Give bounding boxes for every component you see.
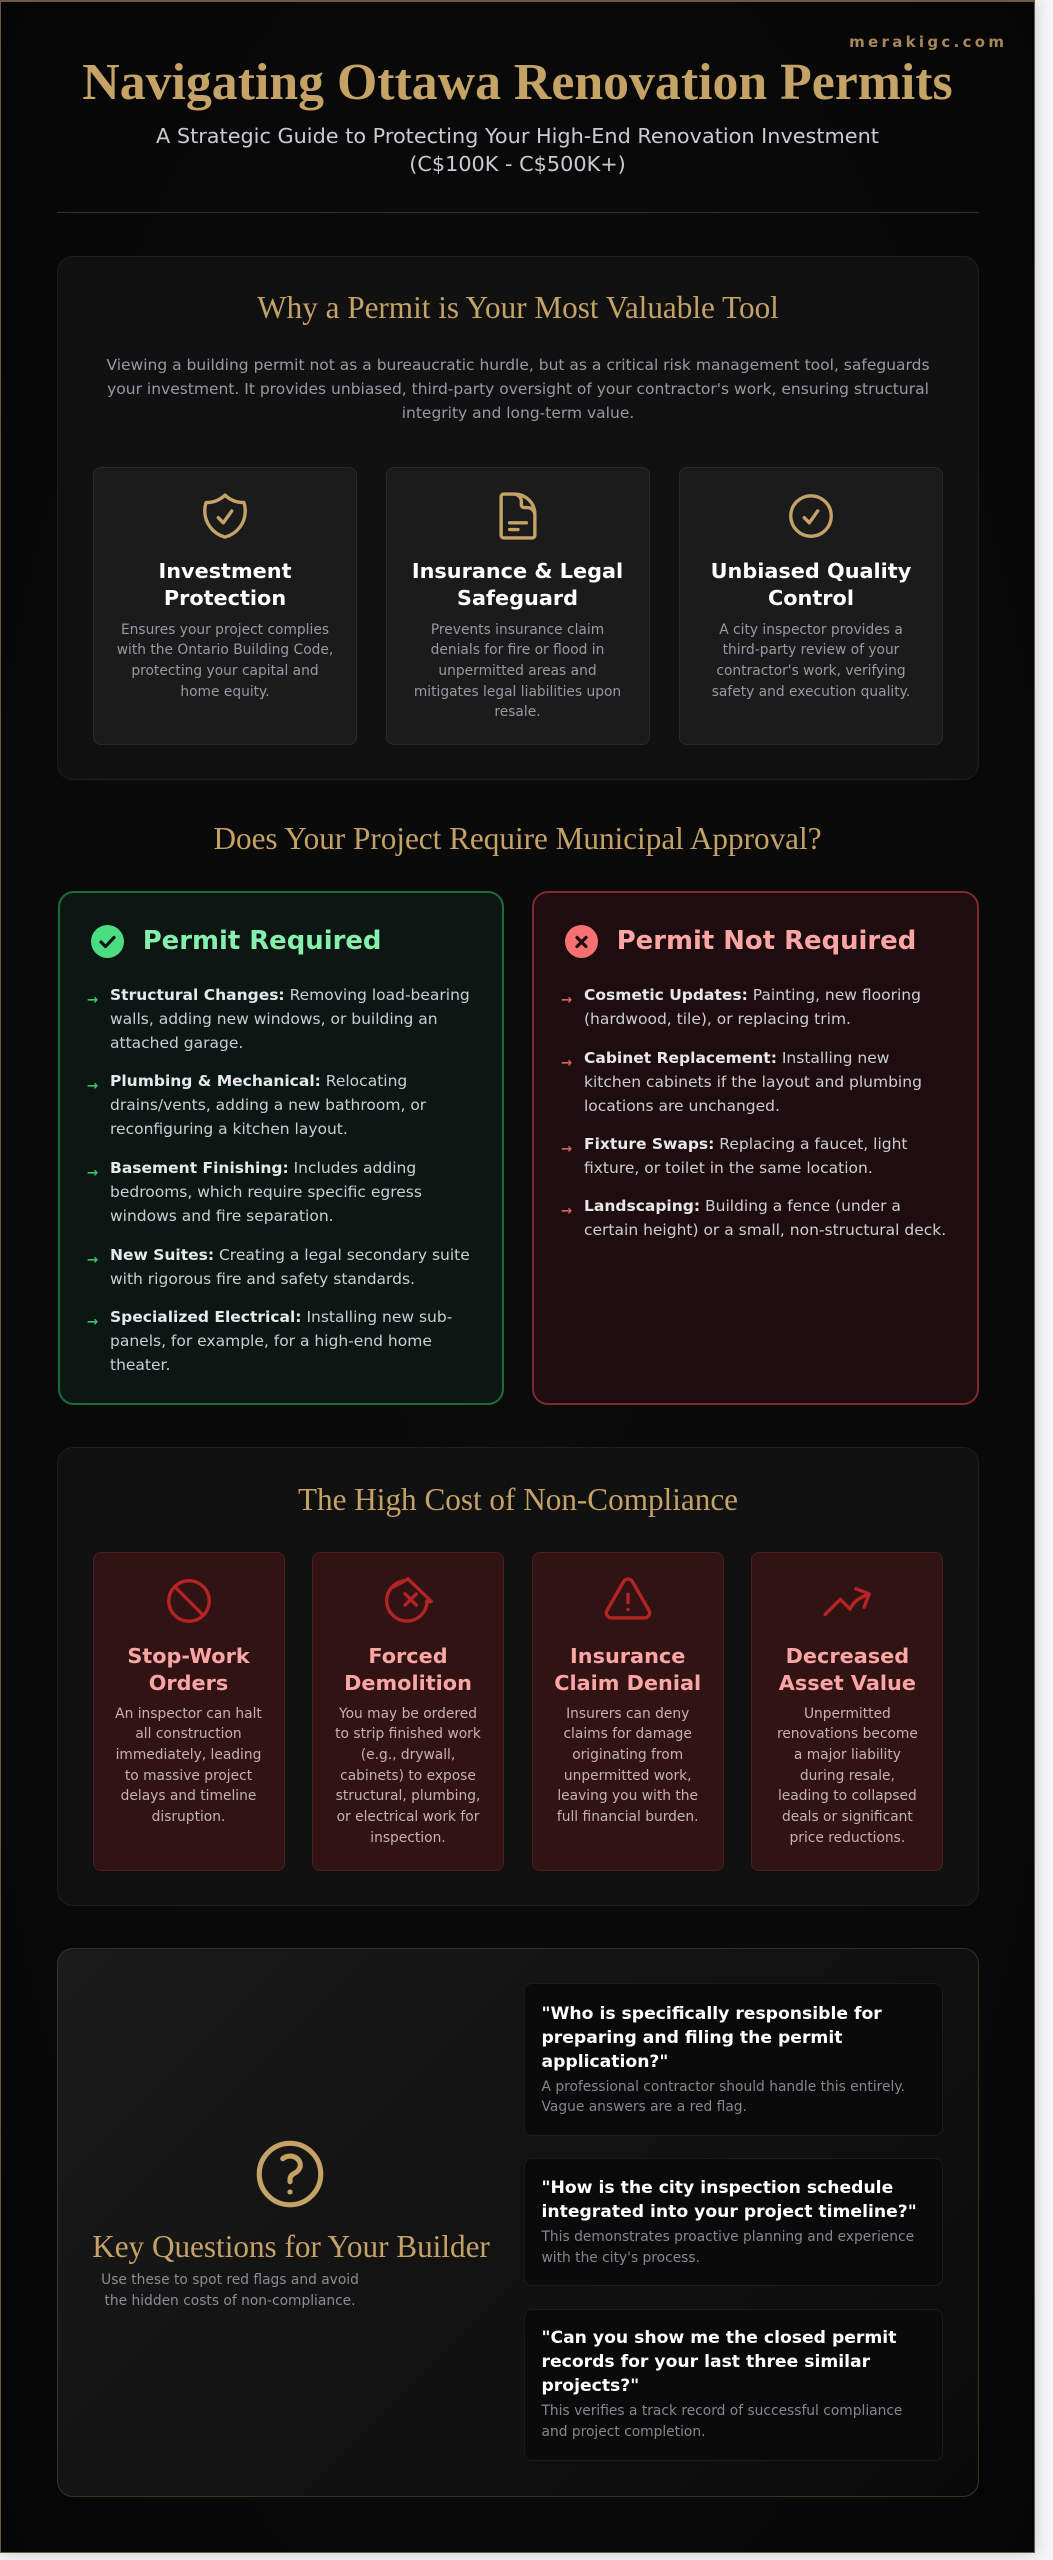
card text: third-party review of your xyxy=(723,642,899,658)
item: basement finishing: bedrooms, which require specific egress xyxy=(110,1183,422,1201)
card text: during resale, xyxy=(800,1768,895,1784)
question: integrated into your project timeline?" xyxy=(542,2202,917,2222)
answer xyxy=(541,2229,914,2266)
panel: permit required xyxy=(58,891,504,1405)
supporting text xyxy=(101,2272,359,2309)
card title xyxy=(711,558,911,610)
icon: red x xyxy=(565,925,598,958)
item: basement finishing: → xyxy=(87,1165,98,1181)
card: forced demolition xyxy=(312,1552,504,1871)
question card 1 xyxy=(524,1983,943,2136)
icon: question mark xyxy=(256,2140,324,2208)
card text: You may be ordered xyxy=(339,1706,477,1722)
card title: Stop-Work xyxy=(127,1644,250,1668)
card text: a major liability xyxy=(794,1747,901,1763)
intro paragraph: your investment. It provides unbiased, third-party oversight of your contractor's work, ensuring structural xyxy=(107,380,929,398)
item: new suites: New Suites: Creating a legal secondary suite xyxy=(110,1246,470,1264)
card text: (e.g., drywall, xyxy=(361,1747,455,1763)
item: new suites: with rigorous fire and safety standards. xyxy=(110,1270,415,1288)
item: landscaping: Landscaping: Building a fence (under a xyxy=(584,1197,901,1215)
card title: Protection xyxy=(164,586,286,610)
item: basement finishing xyxy=(87,1159,422,1225)
card text: Unpermitted xyxy=(804,1706,891,1722)
icon: green check xyxy=(91,925,124,958)
card title xyxy=(554,1644,701,1695)
item: plumbing and mechanical: drains/vents, adding a new bathroom, or xyxy=(110,1096,426,1114)
card text xyxy=(115,1706,262,1825)
item: plumbing and mechanical: → xyxy=(87,1078,98,1094)
card text: leaving you with the xyxy=(557,1788,698,1804)
card title: Asset Value xyxy=(779,1671,916,1695)
card text: denials for fire or flood in xyxy=(431,642,604,658)
icon: warning triangle xyxy=(604,1577,652,1620)
card text: structural, plumbing, xyxy=(336,1788,480,1804)
item: cabinet replacement: Cabinet Replacement: Installing new xyxy=(584,1049,889,1067)
answer: This demonstrates proactive planning and experience xyxy=(542,2229,914,2245)
card text: protecting your capital and xyxy=(131,663,319,679)
icon: damaged circle with x xyxy=(384,1577,434,1623)
panel: key questions for your builder xyxy=(57,1948,979,2497)
icon: shield check xyxy=(203,493,247,539)
intro paragraph xyxy=(106,356,930,422)
card text: resale. xyxy=(494,704,541,720)
item: fixture swaps: Fixture Swaps: Replacing a faucet, light xyxy=(584,1135,908,1153)
heading: why a permit: Why a Permit is Your Most Valuable Tool xyxy=(257,290,779,325)
card text xyxy=(335,1706,481,1846)
card title: Safeguard xyxy=(457,586,578,610)
item: plumbing and mechanical: reconfiguring a kitchen layout. xyxy=(110,1120,348,1138)
item: specialized electrical: Specialized Electrical: Installing new sub- xyxy=(110,1308,452,1326)
card text: claims for damage xyxy=(563,1726,692,1742)
card text: unpermitted work, xyxy=(564,1768,692,1784)
question: "Who is specifically responsible for xyxy=(542,2004,882,2024)
answer: and project completion. xyxy=(542,2424,705,2440)
question xyxy=(542,2178,917,2222)
card text: all construction xyxy=(135,1726,242,1742)
item: basement finishing: windows and fire separation. xyxy=(110,1207,334,1225)
card title: Insurance xyxy=(570,1644,685,1668)
item: cabinet replacement xyxy=(561,1049,922,1115)
card text: price reductions. xyxy=(790,1830,905,1846)
icon: check circle xyxy=(789,494,833,538)
item: fixture swaps: → xyxy=(561,1141,572,1157)
card text: safety and execution quality. xyxy=(712,684,910,700)
item: specialized electrical: → xyxy=(87,1314,98,1330)
title: Navigating Ottawa Renovation Permits xyxy=(82,54,953,111)
card title xyxy=(158,558,292,610)
card text xyxy=(777,1706,918,1846)
card text: disruption. xyxy=(152,1809,225,1825)
item: structural changes: attached garage. xyxy=(110,1034,243,1052)
subtitle xyxy=(156,124,879,176)
item: cabinet replacement: → xyxy=(561,1055,572,1071)
icon: trend arrow xyxy=(823,1587,871,1616)
card title: Demolition xyxy=(344,1671,472,1695)
item: specialized electrical: panels, for example, for a high-end home xyxy=(110,1332,432,1350)
intro paragraph: Viewing a building permit not as a bureaucratic hurdle, but as a critical risk management tool, safeguards xyxy=(106,356,930,374)
intro paragraph: integrity and long-term value. xyxy=(402,404,634,422)
card text: unpermitted areas and xyxy=(438,663,597,679)
item: plumbing and mechanical xyxy=(87,1072,426,1138)
card title: Investment xyxy=(158,558,292,582)
icon: document xyxy=(499,492,537,540)
card text: inspection. xyxy=(370,1830,446,1846)
card title: Unbiased Quality xyxy=(711,558,911,582)
question: preparing and filing the permit xyxy=(542,2028,842,2048)
panel: permit not required xyxy=(532,891,979,1405)
card text: or electrical work for xyxy=(337,1809,479,1825)
item: cabinet replacement: kitchen cabinets if the layout and plumbing xyxy=(584,1073,922,1091)
card title: Insurance & Legal xyxy=(412,558,623,582)
icon: no symbol xyxy=(167,1579,211,1623)
card text xyxy=(712,622,910,700)
card text: leading to collapsed xyxy=(778,1788,917,1804)
heading: does your project require municipal approval: Does Your Project Require Municipal Approval? xyxy=(213,821,822,856)
question card 2 xyxy=(524,2158,943,2286)
item: cosmetic updates: (hardwood, tile), or replacing trim. xyxy=(584,1010,851,1028)
answer xyxy=(542,2079,905,2115)
card text: with the Ontario Building Code, xyxy=(117,642,333,658)
question card 3 xyxy=(524,2308,943,2461)
card text: delays and timeline xyxy=(121,1788,256,1804)
heading: high cost: The High Cost of Non-Compliance xyxy=(298,1482,738,1517)
card text: Insurers can deny xyxy=(566,1706,689,1722)
card text: renovations become xyxy=(777,1726,918,1742)
card text: to massive project xyxy=(125,1768,252,1784)
card text: An inspector can halt xyxy=(115,1706,262,1722)
card title xyxy=(127,1644,250,1695)
item: landscaping: → xyxy=(561,1203,572,1219)
panel heading: Permit Required xyxy=(143,926,381,956)
item: cosmetic updates xyxy=(561,986,921,1028)
card text xyxy=(557,1706,699,1825)
answer: A professional contractor should handle this entirely. xyxy=(542,2079,905,2095)
question xyxy=(542,2326,896,2398)
answer: Vague answers are a red flag. xyxy=(542,2099,747,2115)
item: plumbing and mechanical: Plumbing & Mechanical: Relocating xyxy=(110,1072,407,1090)
card title xyxy=(344,1644,472,1695)
item: specialized electrical: theater. xyxy=(110,1356,170,1374)
card: stop-work orders xyxy=(92,1552,284,1871)
card: insurance and legal safeguard xyxy=(386,467,650,745)
item: structural changes: Structural Changes: Removing load-bearing xyxy=(110,986,470,1004)
heading: key questions: Key Questions for Your Builder xyxy=(92,2229,490,2264)
panel: the high cost of non-compliance xyxy=(57,1447,979,1906)
item: specialized electrical xyxy=(87,1308,452,1374)
question: "How is the city inspection schedule xyxy=(542,2178,893,2198)
subtitle: (C$100K - C$500K+) xyxy=(409,152,626,176)
item: structural changes xyxy=(87,986,470,1052)
card text: deals or significant xyxy=(782,1809,913,1825)
card text: home equity. xyxy=(180,684,270,700)
item: cosmetic updates: Cosmetic Updates: Painting, new flooring xyxy=(584,986,921,1004)
card text: originating from xyxy=(572,1747,683,1763)
card: decreased asset value xyxy=(751,1552,943,1871)
item: structural changes: walls, adding new windows, or building an xyxy=(110,1010,438,1028)
question: records for your last three similar xyxy=(542,2352,870,2372)
item: cabinet replacement: locations are unchanged. xyxy=(584,1097,780,1115)
answer xyxy=(542,2401,902,2443)
item: cosmetic updates: → xyxy=(561,992,572,1008)
item: landscaping xyxy=(561,1197,946,1239)
card title: Decreased xyxy=(786,1644,909,1668)
question xyxy=(542,2004,882,2072)
question: "Can you show me the closed permit xyxy=(542,2328,896,2348)
card text: mitigates legal liabilities upon xyxy=(414,684,621,700)
card text: contractor's work, verifying xyxy=(716,663,906,679)
item: structural changes: → xyxy=(87,992,98,1008)
card title: Orders xyxy=(149,1671,228,1695)
card text: full financial burden. xyxy=(557,1809,699,1825)
card title: Control xyxy=(768,586,854,610)
panel: why a permit is your most valuable tool xyxy=(57,256,979,780)
panel heading: Permit Not Required xyxy=(617,926,916,956)
item: landscaping: certain height) or a small, non-structural deck. xyxy=(584,1221,946,1239)
card: unbiased quality control xyxy=(679,467,943,745)
question: projects?" xyxy=(542,2376,639,2396)
card: insurance claim denial xyxy=(532,1552,724,1871)
card text: Ensures your project complies xyxy=(121,622,329,638)
supporting text: Use these to spot red flags and avoid xyxy=(101,2272,359,2288)
item: new suites xyxy=(87,1246,470,1288)
card text: A city inspector provides a xyxy=(719,622,903,638)
item: basement finishing: Basement Finishing: Includes adding xyxy=(110,1159,416,1177)
card text: Prevents insurance claim xyxy=(431,622,604,638)
card text: to strip finished work xyxy=(335,1726,481,1742)
item: fixture swaps: fixture, or toilet in the same location. xyxy=(584,1159,873,1177)
watermark: merakigc.com: merakigc.com xyxy=(849,33,1007,51)
card title: Forced xyxy=(368,1644,448,1668)
item: new suites: → xyxy=(87,1252,98,1268)
card title xyxy=(778,1644,916,1695)
item: fixture swaps xyxy=(561,1135,908,1177)
card: investment protection xyxy=(93,467,357,745)
answer: with the city's process. xyxy=(542,2250,700,2266)
supporting text: the hidden costs of non-compliance. xyxy=(104,2293,356,2309)
question: application?" xyxy=(542,2052,668,2072)
card text xyxy=(414,622,621,720)
card title: Claim Denial xyxy=(554,1671,701,1695)
answer: This verifies a track record of successful compliance xyxy=(542,2403,902,2419)
card text xyxy=(117,622,333,700)
card title xyxy=(412,558,623,610)
card text: immediately, leading xyxy=(116,1747,261,1763)
subtitle: A Strategic Guide to Protecting Your High-End Renovation Investment xyxy=(156,124,879,148)
card text: cabinets) to expose xyxy=(340,1768,476,1784)
